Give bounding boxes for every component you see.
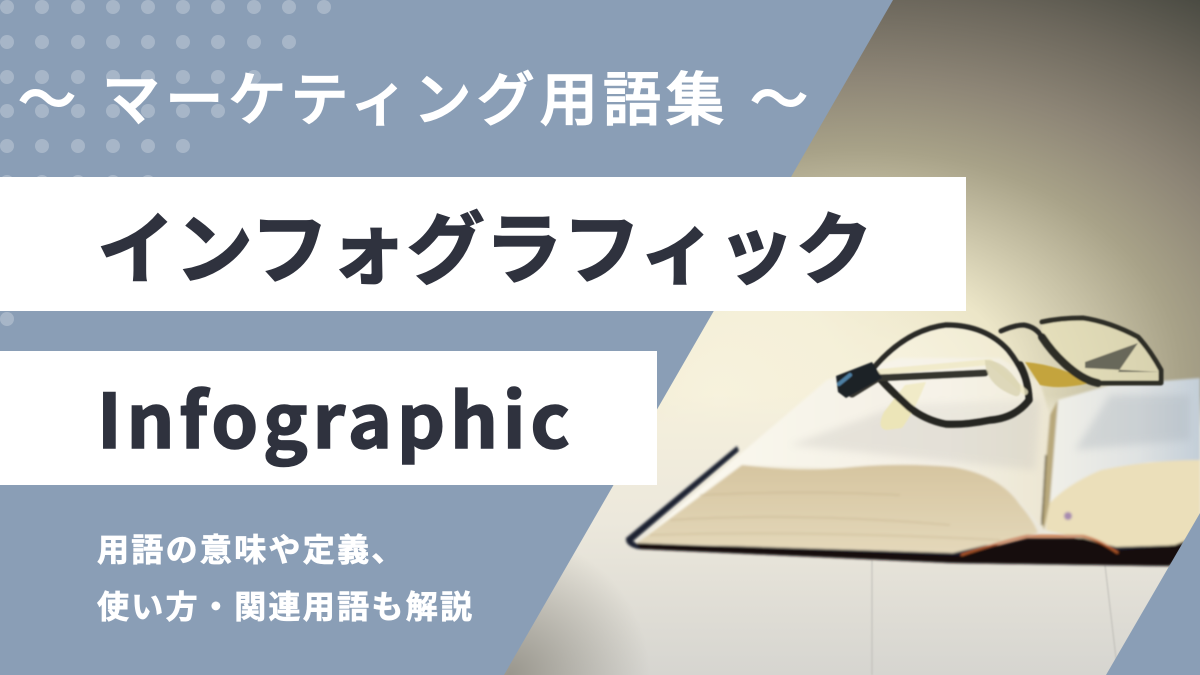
glasses front lens [872,325,1029,424]
glasses temple [852,373,985,394]
glasses nose pad clear [985,360,1020,396]
glasses cream temple highlight [880,362,1025,392]
left page [637,358,1050,543]
panel: blue bottom right corner [1106,513,1200,675]
right page [1046,378,1200,507]
title: infographic in katakana: インフォグラフィック [97,188,873,300]
printed text texture [802,402,1038,468]
left page block [637,465,1038,553]
subtitle text: 用語の意味や定義、 [97,525,406,571]
photo: open book and glasses [480,0,1200,675]
book cover [626,446,1200,566]
glasses hinge [836,362,882,398]
glasses far temple shadow [1085,343,1160,372]
page block strips [700,494,998,540]
heading: marketing glossary: 〜 [750,53,808,137]
book bottom binding [637,535,1200,566]
title: Infographic: Infographic [97,361,575,470]
panel: Japanese title bar [0,177,966,311]
glasses [836,318,1161,430]
book [626,358,1200,566]
dot pattern [0,0,331,326]
panel: English title bar [0,351,657,485]
glasses nose pad gold [1025,362,1090,387]
photo table [480,395,1200,675]
gutter [1041,400,1058,530]
heading: marketing glossary: マーケティング用語集 [102,53,729,137]
subtitle text [97,525,474,628]
glasses far lens [1042,318,1161,383]
glasses bridge [1001,325,1042,337]
subtitle text: 使い方・関連用語も解説 [97,582,474,628]
photo backdrop wall [774,0,1200,415]
photo backdrop glow [657,311,820,422]
right page block [1046,460,1200,547]
panel: blue left diagonal [0,0,893,675]
glasses ear tip [880,382,926,430]
page stamp [1064,512,1072,520]
heading: marketing glossary: 〜 [18,53,76,137]
